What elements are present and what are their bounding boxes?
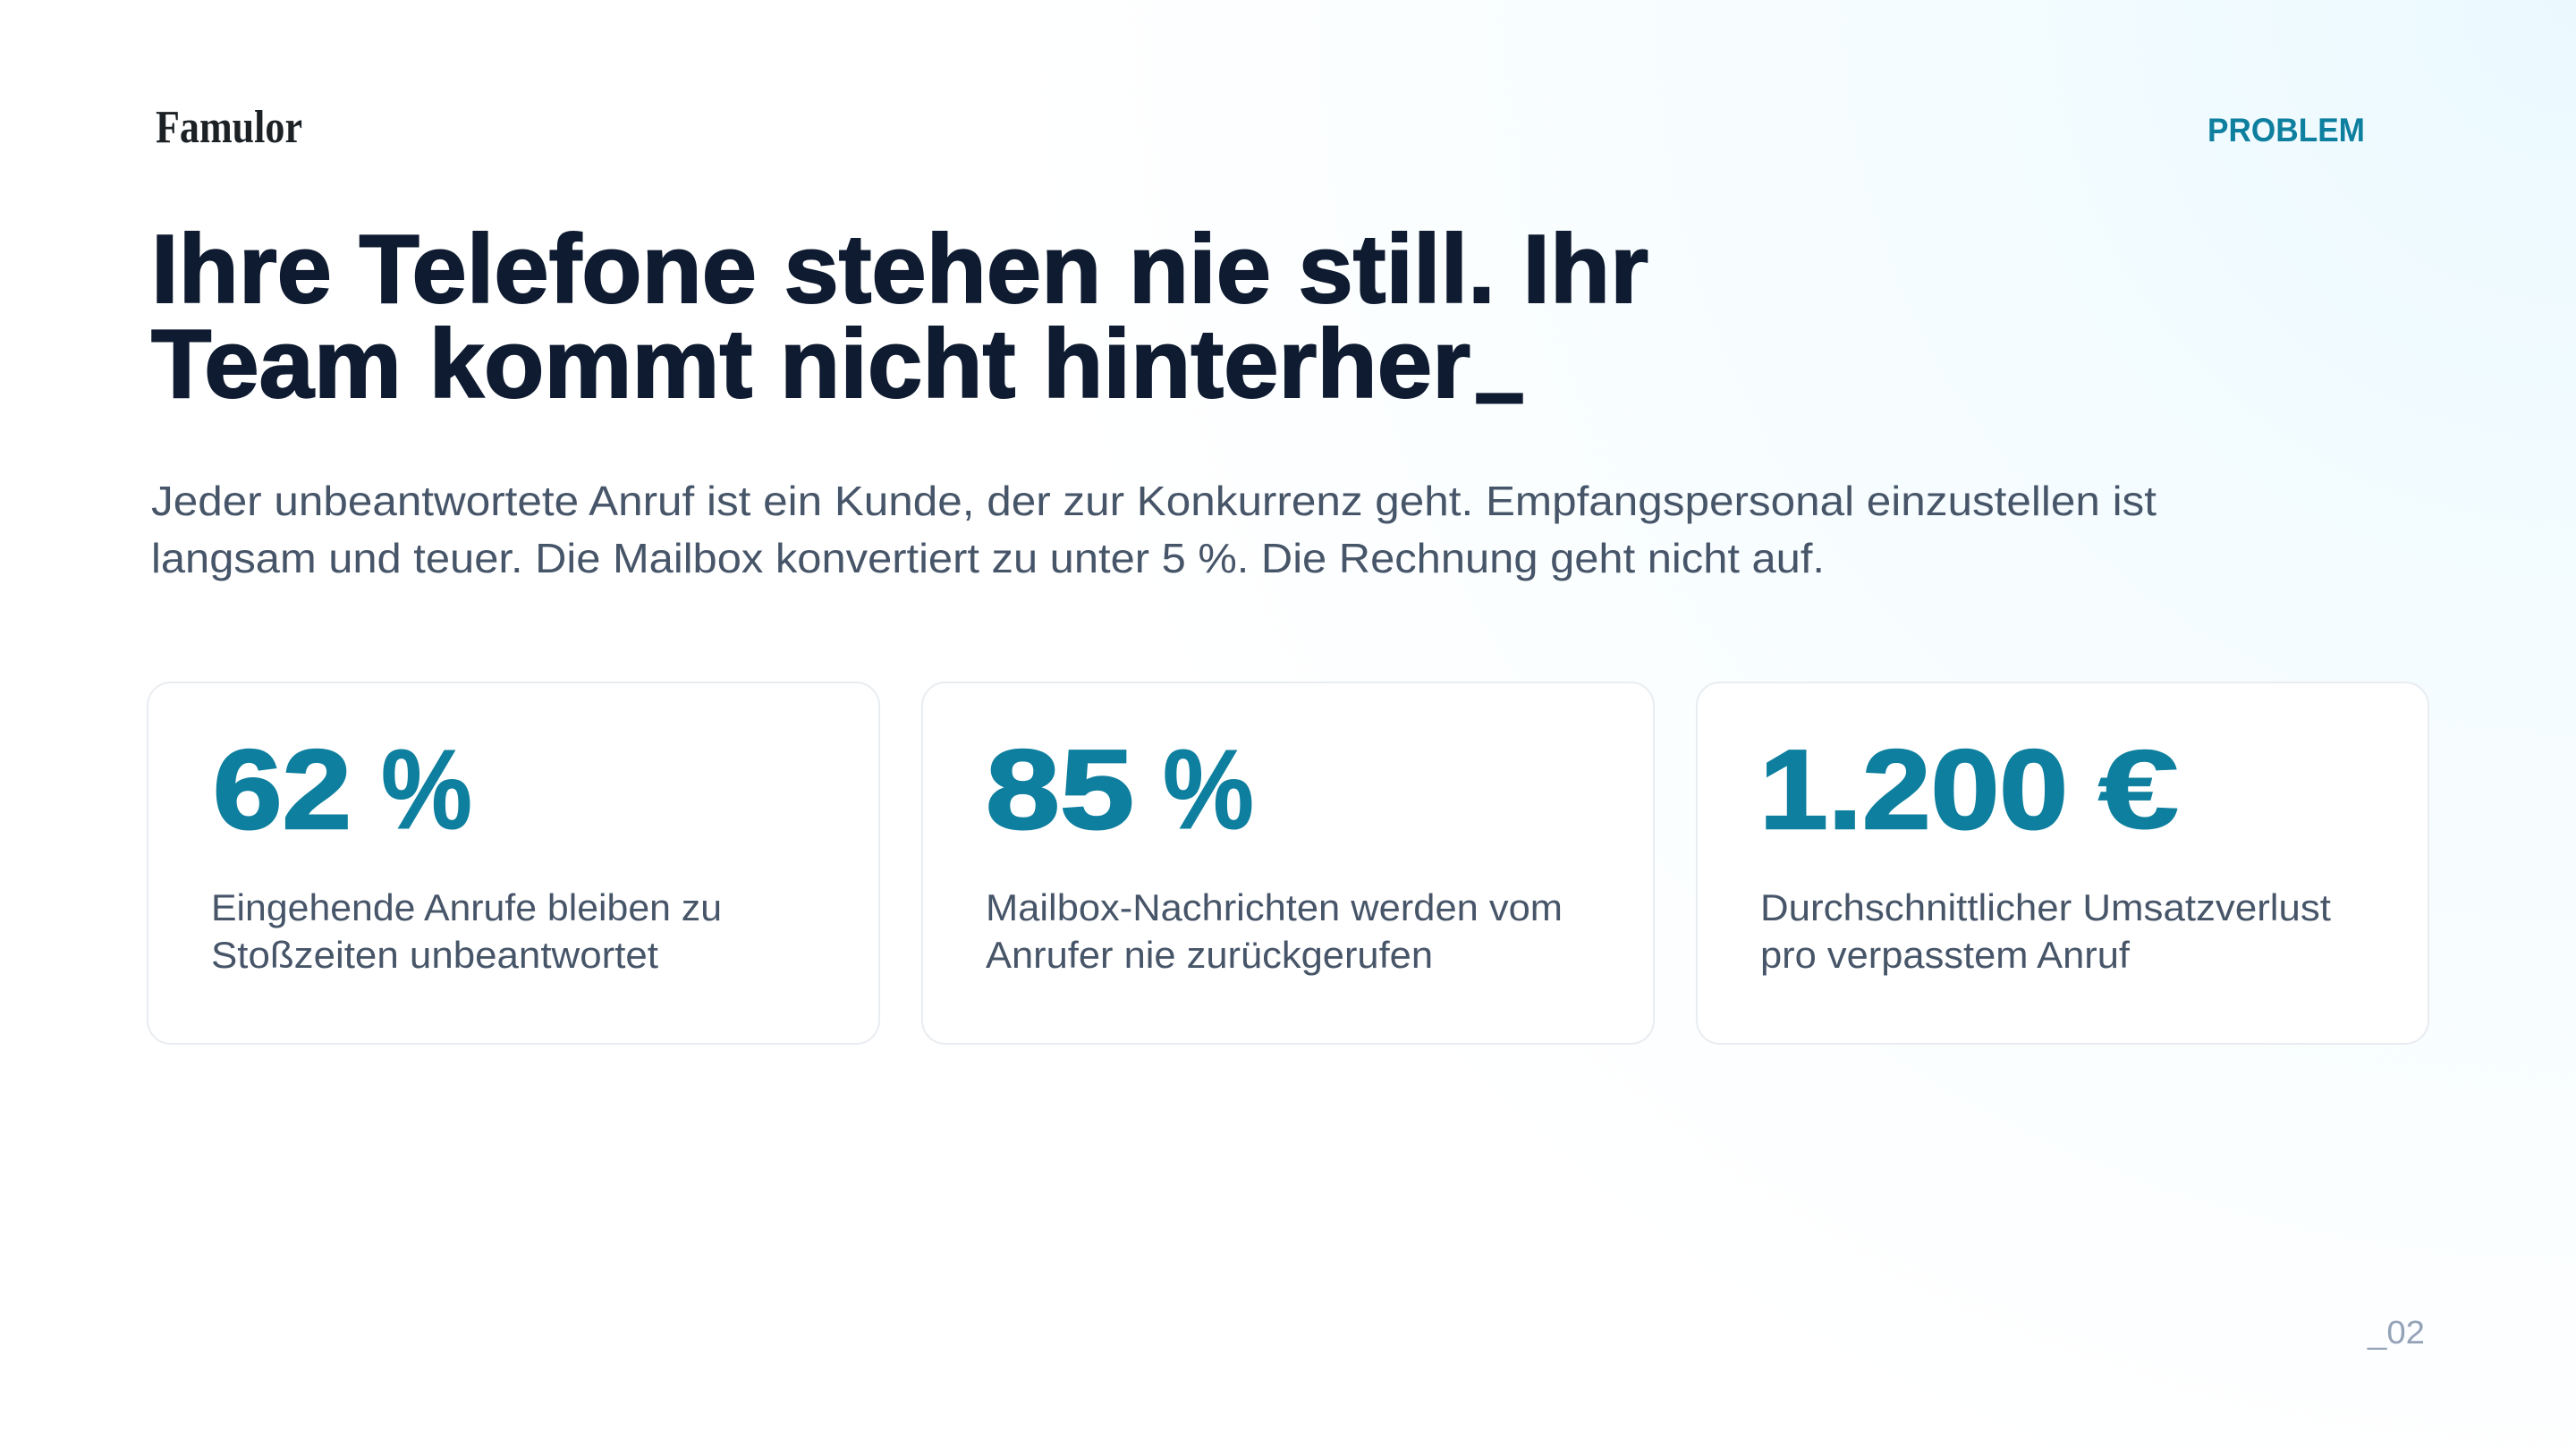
title (151, 215, 1648, 419)
stat description: pro verpasstem Anruf (1760, 934, 2130, 976)
stat description (986, 886, 1563, 976)
logo: Famulor: Famulor (156, 102, 302, 153)
stat value: 62 %: 62 (213, 726, 352, 852)
page number: _02 (2367, 1314, 2425, 1351)
panel: stat card 62 % (148, 682, 879, 1044)
stat value: 85 %: % (1163, 726, 1254, 852)
intro text: Jeder unbeantwortete Anruf ist ein Kunde, der zur Konkurrenz geht. Empfangspersonal einzustellen ist (151, 478, 2157, 524)
stat description (211, 886, 722, 976)
title: Team kommt nicht hinterher (151, 309, 1470, 419)
stat description: Anrufer nie zurückgerufen (986, 934, 1433, 976)
title: Ihre Telefone stehen nie still. Ihr (151, 215, 1648, 324)
intro text (151, 478, 2157, 581)
stat value: 85 %: 85 (986, 726, 1134, 852)
title: _ (1479, 301, 1521, 410)
stat value: 85 % (986, 726, 1254, 852)
stat value: 1.200 € (1759, 726, 2180, 852)
stat description: Eingehende Anrufe bleiben zu (211, 886, 722, 928)
intro text: langsam und teuer. Die Mailbox konvertiert zu unter 5 %. Die Rechnung geht nicht auf. (151, 535, 1825, 581)
section label: PROBLEM: PROBLEM (2207, 112, 2365, 148)
stat description (1760, 886, 2331, 976)
stat value: 1.200 €: 1.200 (1759, 726, 2068, 852)
panel: stat card 1.200 € (1697, 682, 2428, 1044)
stat value: 1.200 €: € (2097, 726, 2180, 852)
stat description: Durchschnittlicher Umsatzverlust (1760, 886, 2331, 928)
stat value: 62 %: % (381, 726, 472, 852)
stat description: Mailbox-Nachrichten werden vom (986, 886, 1563, 928)
panel: stat card 85 % (922, 682, 1654, 1044)
stat value: 62 % (213, 726, 472, 852)
stat description: Stoßzeiten unbeantwortet (211, 934, 658, 976)
